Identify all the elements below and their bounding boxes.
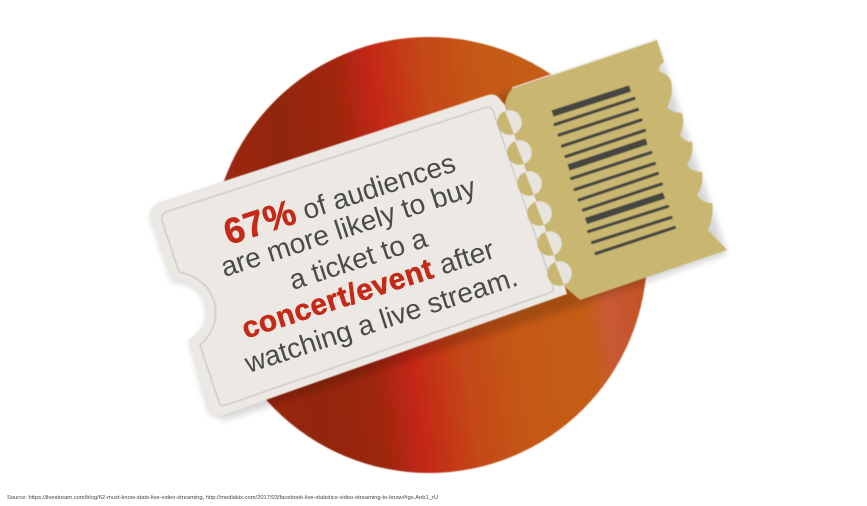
line 1: 67% of audiences — [218, 139, 460, 253]
ticket shadow — [150, 44, 727, 420]
line 4: concert/event after — [238, 233, 498, 345]
ticket — [150, 39, 727, 420]
inner ticket outline — [162, 107, 553, 406]
ticket stub — [505, 39, 727, 300]
source line: Source: https://livestream.com/blog/62-must-know-stats-live-video-streaming, http://mediakix.com/2017/03/facebook-live-statistics-video-streaming-to-know/#gs.Anb1_rU — [7, 495, 438, 501]
perforation holes — [497, 110, 572, 286]
line 2: are more likely to buy — [217, 171, 479, 283]
stub top highlight — [512, 39, 657, 88]
ticket body — [150, 94, 572, 416]
line 5: watching a live stream. — [240, 261, 521, 379]
ticket text — [217, 139, 521, 379]
circle background — [211, 37, 647, 473]
line 3: a ticket to a — [285, 222, 431, 296]
barcode — [552, 88, 674, 254]
